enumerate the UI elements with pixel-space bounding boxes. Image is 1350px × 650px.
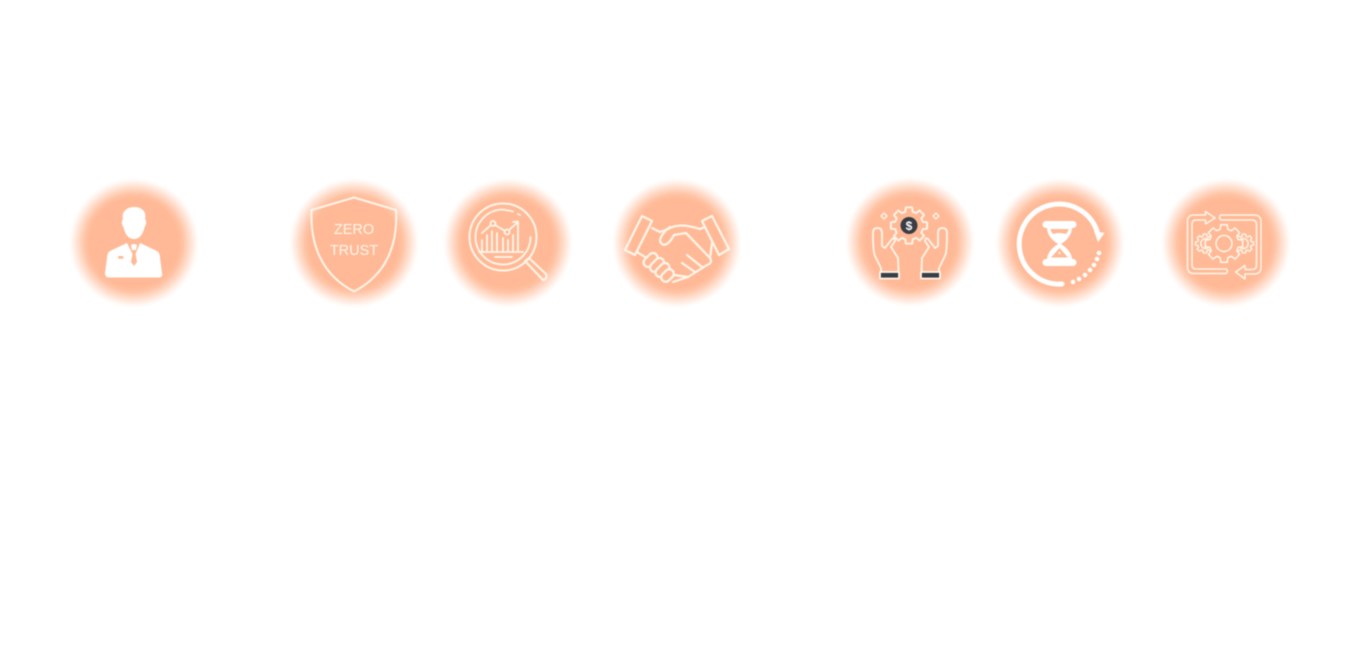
icon: hands holding money gear: $ [906, 219, 913, 233]
icon: zero trust shield: ZERO [334, 222, 374, 238]
icon: process gears cycle [1161, 178, 1291, 308]
icon: businessman [69, 178, 199, 308]
icon: magnifier with chart [443, 178, 573, 308]
icon: hourglass with progress ring [995, 178, 1125, 308]
icon: zero trust shield [289, 178, 419, 308]
icon: hands holding money gear [845, 177, 975, 307]
icon: zero trust shield: TRUST [330, 243, 378, 259]
icon: handshake [612, 178, 742, 308]
